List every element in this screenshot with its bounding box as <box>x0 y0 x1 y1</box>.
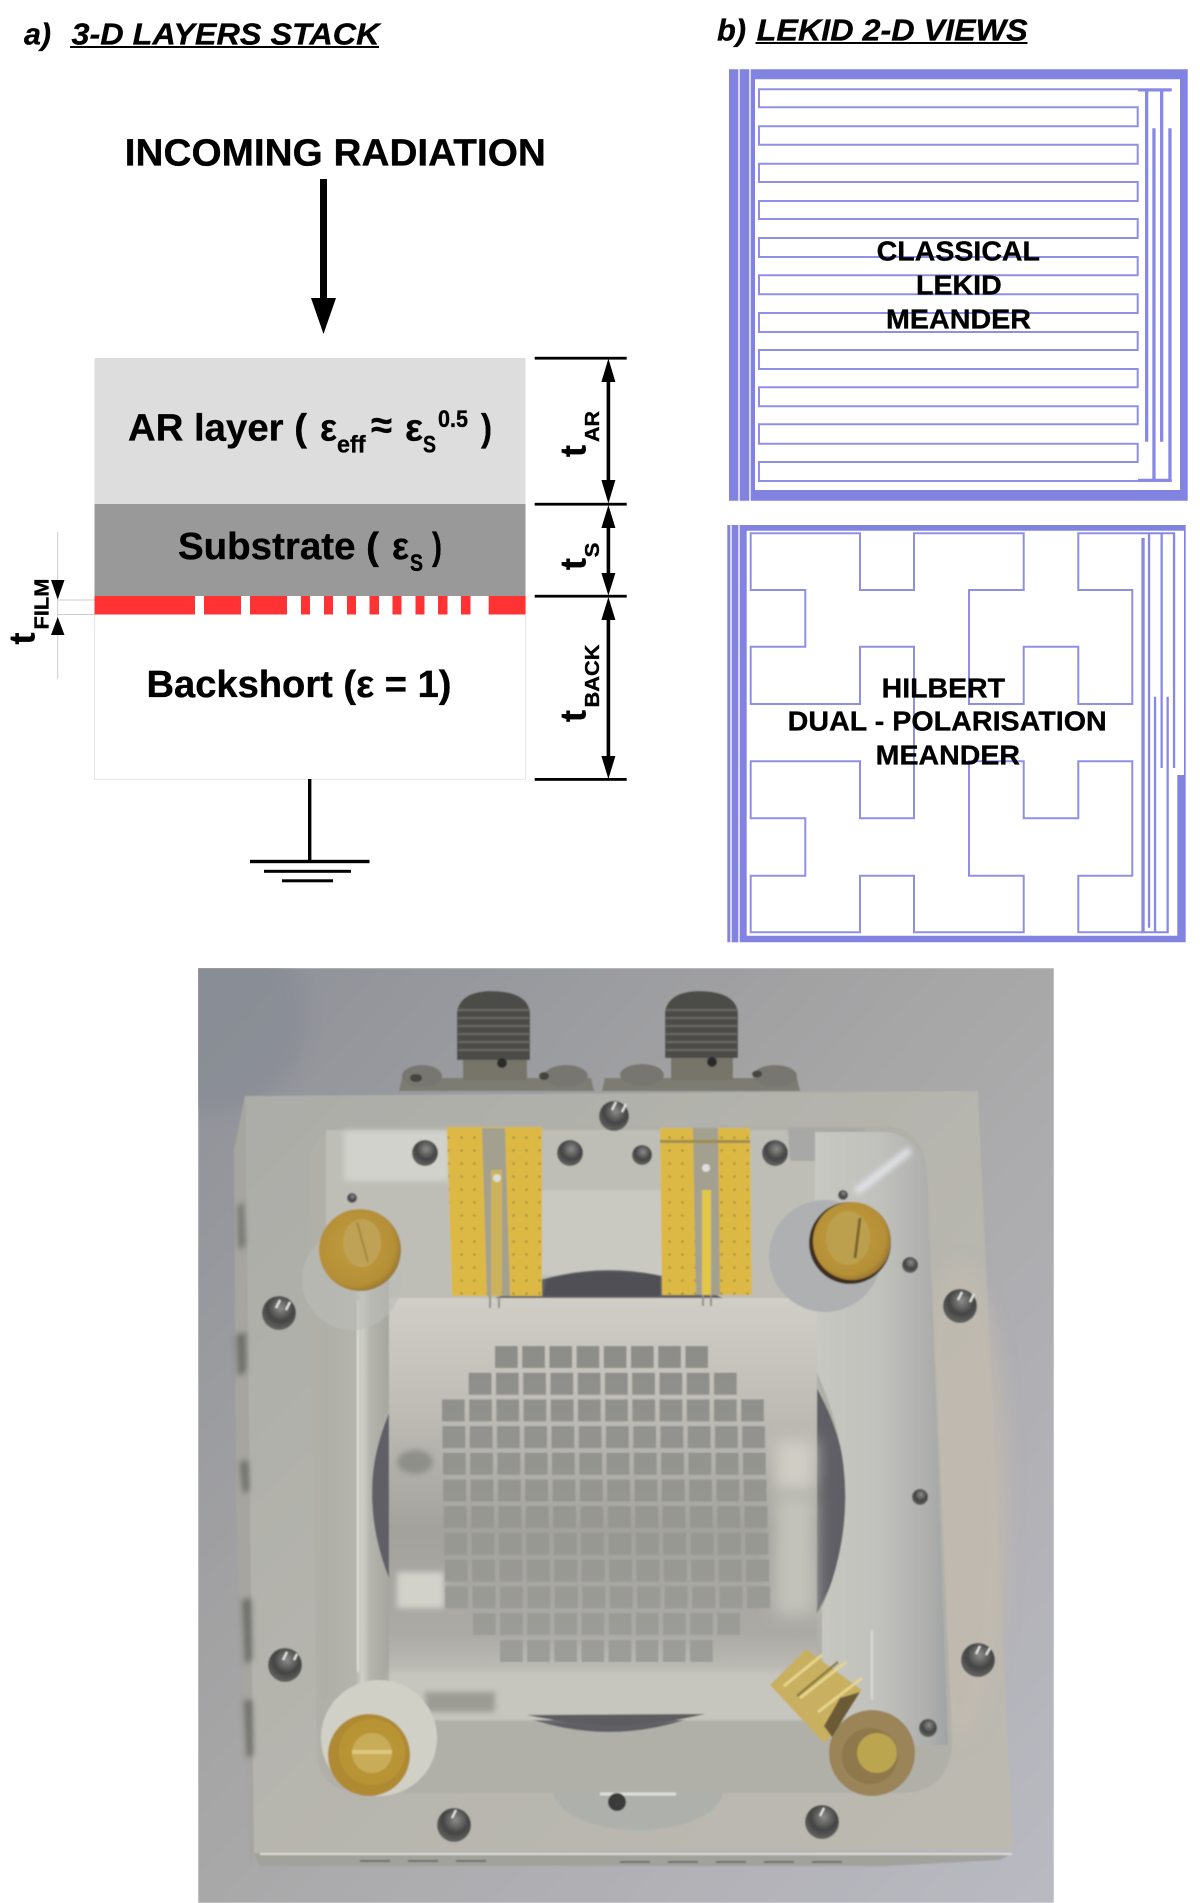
wafer <box>389 1298 817 1720</box>
photo background <box>198 968 1054 1903</box>
coaxial connectors <box>399 991 800 1091</box>
layer: substrate: ) <box>432 526 442 568</box>
brass screw bottom-right <box>829 1710 915 1796</box>
side bars <box>322 1132 948 1745</box>
brass screw bottom-left <box>328 1714 410 1796</box>
Hilbert line <box>751 533 1142 932</box>
screw holes <box>262 1101 995 1842</box>
dimension: t BACK: t <box>552 710 593 722</box>
brass screw top-left <box>319 1209 401 1291</box>
label: classical meander: MEANDER <box>886 304 1031 335</box>
label: classical meander: CLASSICAL <box>877 236 1040 267</box>
layer: AR layer: ) <box>481 408 492 450</box>
layer: AR layer: eff <box>337 432 366 458</box>
dimension: t FILM <box>2 532 95 679</box>
layer: AR layer: 0.5 <box>438 406 468 433</box>
label: classical meander <box>877 236 1040 335</box>
layer: AR layer: AR layer ( <box>128 408 307 450</box>
dimension: t AR: t <box>552 445 593 457</box>
bottom aperture sliver <box>527 1714 705 1725</box>
dimension: t S: t <box>552 558 593 570</box>
dimension: t S <box>535 505 627 598</box>
layer: AR layer: ε <box>405 408 423 450</box>
layer: AR layer: S <box>423 432 436 458</box>
dark circular aperture <box>371 1270 847 1732</box>
holder plate <box>234 1091 1013 1866</box>
washers <box>302 1200 881 1796</box>
dimension: t BACK: BACK <box>581 644 604 708</box>
label: Hilbert meander: HILBERT <box>882 672 1005 703</box>
capacitor fingers <box>1141 532 1175 933</box>
dimension: t BACK <box>535 597 627 781</box>
label: classical meander: LEKID <box>916 270 1002 301</box>
heading b: LEKID 2-D VIEWS <box>757 13 1028 48</box>
layer: backshort <box>94 614 526 779</box>
panel a: 3-D layers stack <box>2 16 627 882</box>
corner highlight <box>856 1150 910 1192</box>
layer: red film <box>94 596 526 614</box>
panel b: LEKID 2-D views <box>717 13 1188 942</box>
incoming radiation label: INCOMING RADIATION <box>125 132 546 174</box>
layer: backshort: Backshort (ε = 1) <box>146 664 452 706</box>
gold clip left <box>447 1127 542 1308</box>
dimension: t FILM: t <box>2 632 43 644</box>
dimension: t S: S <box>581 542 604 558</box>
clip bridge shadow <box>544 1272 660 1296</box>
plate side stains <box>236 1203 253 1758</box>
label: Hilbert meander <box>788 672 1107 771</box>
dimension: t AR: AR <box>581 411 604 442</box>
layer: AR layer: ε <box>320 408 337 450</box>
ground symbol <box>250 779 370 882</box>
bottom recess bulge <box>554 1793 722 1830</box>
outer frame <box>727 525 1186 942</box>
glass top strip <box>326 1128 815 1298</box>
diagram: classical LEKID meander <box>729 69 1188 501</box>
heading b: b) <box>717 13 746 48</box>
wafer lighting patches <box>389 1440 817 1718</box>
dimension: t FILM: FILM <box>30 579 54 630</box>
layer: substrate: ε <box>392 526 409 568</box>
layer: substrate <box>94 504 526 596</box>
photo: assembled detector array in holder <box>198 968 1054 1903</box>
label: Hilbert meander: DUAL - POLARISATION <box>788 706 1107 737</box>
heading a: 3-D LAYERS STACK <box>72 16 382 52</box>
layer: AR layer <box>94 358 526 504</box>
wafer marking <box>425 1692 495 1712</box>
gold block <box>770 1649 862 1743</box>
interdigitated capacitor <box>1138 89 1172 481</box>
meander line <box>759 89 1172 481</box>
recess <box>578 1327 952 1792</box>
layer: AR layer: ≈ <box>371 405 392 447</box>
diagram: Hilbert dual-polarisation meander <box>727 525 1186 942</box>
detector pixel array <box>442 1357 770 1651</box>
brass screw top-right <box>809 1202 891 1284</box>
heading a: a) <box>24 16 51 52</box>
arrow: incoming radiation <box>311 179 336 334</box>
dimension: t AR <box>535 357 627 506</box>
gold clip right <box>660 1128 752 1306</box>
bulge highlight <box>600 1792 676 1796</box>
label: Hilbert meander: MEANDER <box>876 740 1020 771</box>
layer: substrate: S <box>410 550 423 577</box>
outer frame <box>729 69 1188 501</box>
layer: substrate: Substrate ( <box>178 526 379 568</box>
